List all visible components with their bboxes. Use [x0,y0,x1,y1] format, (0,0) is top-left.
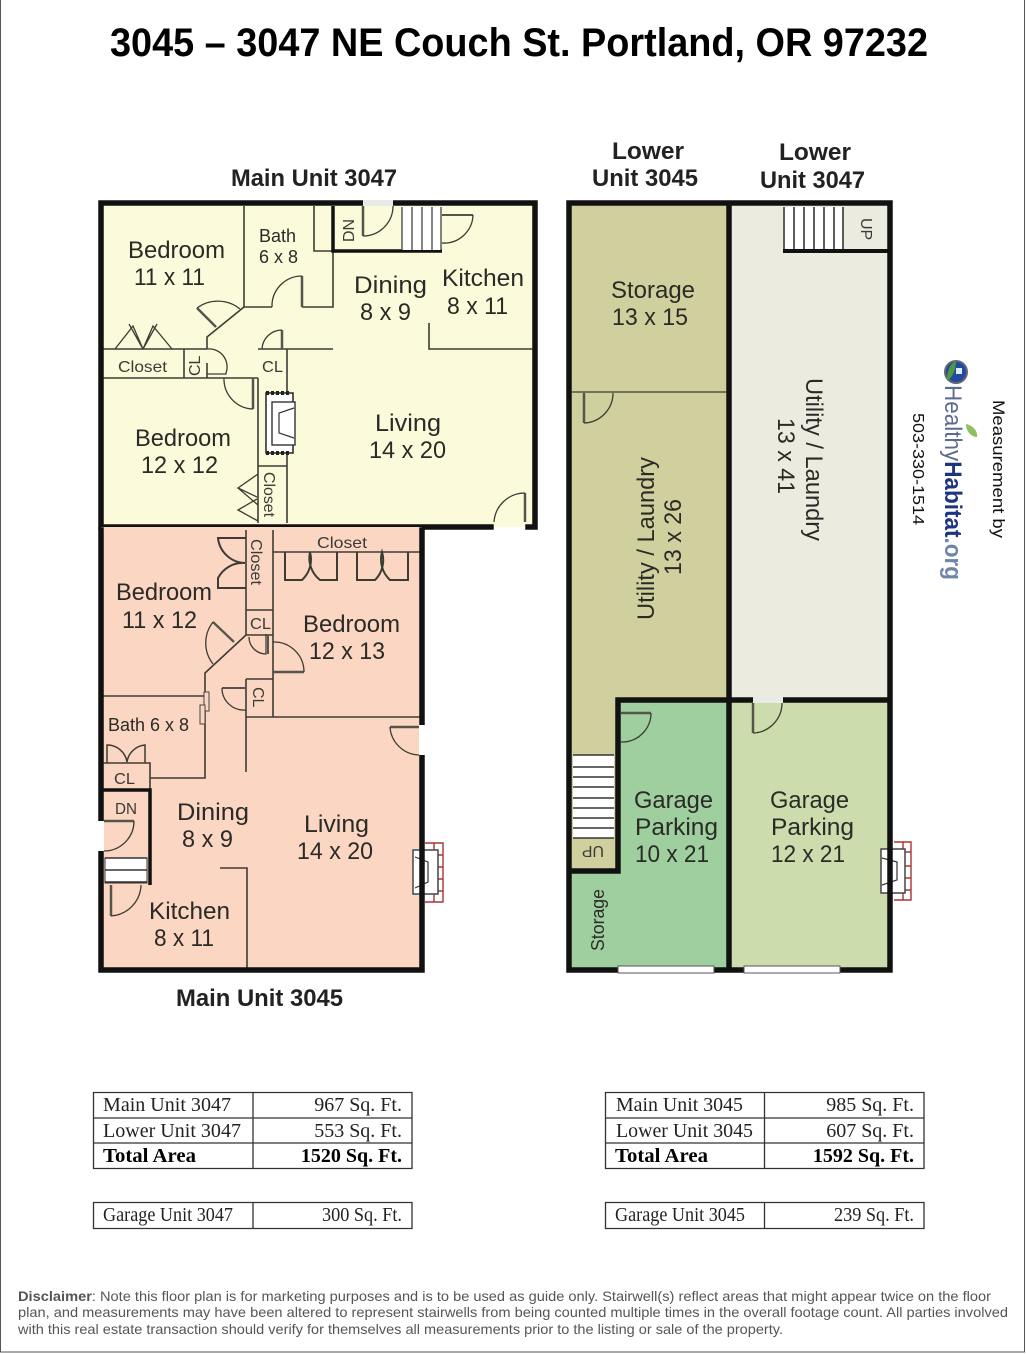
chimney [413,843,443,902]
measurement credit: Measurement by [989,400,1008,539]
table: unit 3047 areas: Main Unit 3047 [103,1094,231,1116]
disclaimer: plan, and measurements may have been altered to represent stairwells from being counted multiple times in the overall footage count. All parties involved [18,1304,1008,1320]
room labels: CL [262,359,283,376]
storage partition [572,391,726,393]
interior walls [103,530,420,968]
garage windows [618,966,714,973]
room labels: Closet [260,472,277,518]
room labels [582,218,874,951]
outer walls [101,530,422,970]
table: unit 3047 areas: Total Area [103,1145,196,1167]
room labels: Kitchen [442,265,524,292]
table: unit 3047 areas: 967 Sq. Ft. [314,1094,402,1116]
room labels: Kitchen [149,898,230,925]
measurement credit [909,361,1008,580]
door: storage [584,393,613,423]
room labels: UP [582,842,604,859]
room labels: DN [115,801,137,818]
room labels: 8 x 9 [360,299,411,326]
door: garage left [621,713,651,742]
room labels: 10 x 21 [635,841,709,868]
room labels: Closet [118,359,168,376]
room labels: Garage [770,787,849,814]
table: unit 3047 areas: 553 Sq. Ft. [314,1120,402,1142]
room labels: 12 x 13 [309,638,385,665]
table: unit 3045 areas: Total Area [615,1145,708,1167]
room labels [108,535,400,952]
floor plan: lower level and garages [569,203,911,973]
chimney [881,842,911,900]
doors [103,538,420,916]
room labels: Utility / Laundry [633,457,660,620]
room labels: Bedroom [303,611,400,638]
table: unit 3045 areas [606,1092,924,1168]
table: unit 3045 areas: Main Unit 3045 [616,1094,743,1116]
room labels: CL [187,355,204,376]
room labels: 8 x 11 [447,293,508,320]
table: garage 3045 [606,1202,924,1228]
stairs: lower 3047 [783,207,888,251]
room labels: Bedroom [116,579,212,606]
icon: leaf [966,424,977,437]
table: garage 3047 [94,1202,412,1228]
room labels: Parking [771,814,854,841]
room labels: Dining [354,272,427,299]
disclaimer [17,1288,1008,1337]
door: garage right [753,703,782,733]
measurement credit: 503-330-1514 [909,413,926,525]
table: unit 3047 areas: Lower Unit 3047 [103,1120,241,1142]
room labels: Closet [247,539,264,586]
title: 3045 – 3047 NE Couch St. Portland, OR 97232 [110,21,928,65]
room labels: 11 x 12 [122,607,197,634]
room labels: 13 x 41 [772,418,799,494]
room labels: Garage [634,787,713,814]
table: garage 3045: Garage Unit 3045 [615,1204,745,1226]
room labels: 11 x 11 [134,264,205,291]
room labels: Bath [259,226,296,246]
doors [115,206,525,522]
icon: Healthy Habitat logo [945,361,967,383]
stair walls [333,206,442,251]
room labels: Dining [177,799,249,826]
room labels: UP [857,218,874,240]
heading: Main Unit 3047: Main Unit 3047 [231,165,397,192]
heading: Main Unit 3045: Main Unit 3045 [176,985,343,1012]
room labels: Parking [635,814,718,841]
room labels: CL [250,616,271,633]
room labels: Bath 6 x 8 [108,715,189,735]
table: unit 3045 areas: 607 Sq. Ft. [826,1120,914,1142]
room labels: 6 x 8 [259,247,298,267]
room labels: Bedroom [128,237,225,264]
stair walls [103,790,150,885]
outer walls [101,203,535,527]
room labels: 14 x 20 [297,838,373,865]
disclaimer: with this real estate transaction should verify for themselves all measurements prior to the listing or sale of the property. [17,1321,783,1337]
room labels: 13 x 15 [612,304,688,331]
heading: Lower Unit 3047: Unit 3047 [760,167,865,194]
heading: Lower Unit 3045 [592,138,698,192]
room labels: 8 x 9 [182,826,233,853]
stairs: lower 3045 [573,755,614,838]
table: unit 3045 areas: 1592 Sq. Ft. [813,1145,914,1167]
room labels: CL [114,771,135,788]
walls [569,203,890,970]
room fills [569,203,729,871]
heading: Lower Unit 3045: Unit 3045 [592,165,698,192]
floor plan: Main Unit 3045 [98,527,443,970]
table: unit 3045 areas: Lower Unit 3045 [616,1120,753,1142]
room labels: Storage [588,889,608,951]
room labels [118,219,524,518]
table: garage 3047: 300 Sq. Ft. [322,1204,402,1226]
room labels: DN [341,219,358,242]
room labels: 12 x 21 [771,841,845,868]
room labels: Living [375,410,441,437]
stairs [402,207,441,250]
disclaimer: Disclaimer: Note this floor plan is for marketing purposes and is to be used as guide only. Stairwell(s) reflect areas that might appear twice on the floor [18,1288,991,1304]
room labels: Closet [317,535,368,552]
heading: Lower Unit 3047 [760,139,865,194]
stairs [105,858,147,883]
table: garage 3045: 239 Sq. Ft. [834,1204,914,1226]
room labels: 14 x 20 [369,437,446,464]
table: unit 3047 areas: 1520 Sq. Ft. [301,1145,402,1167]
table: unit 3045 areas: 985 Sq. Ft. [826,1094,914,1116]
floor plan: Main Unit 3047 [101,200,535,527]
heading: Lower Unit 3045: Lower [612,138,684,165]
room labels: 13 x 26 [660,499,687,575]
fireplace [266,393,295,453]
room labels: Storage [611,277,695,304]
heading: Lower Unit 3047: Lower [779,139,851,166]
room labels: 8 x 11 [154,925,214,952]
room labels: CL [249,687,266,708]
room labels: Utility / Laundry [800,378,827,541]
room labels: Living [304,811,369,838]
logo wordmark: HealthyHabitat.org [939,385,966,580]
room labels: 12 x 12 [141,452,218,479]
room labels: Bedroom [135,425,231,452]
table: garage 3047: Garage Unit 3047 [103,1204,233,1226]
interior walls [103,206,533,523]
table: unit 3047 areas [94,1092,412,1168]
